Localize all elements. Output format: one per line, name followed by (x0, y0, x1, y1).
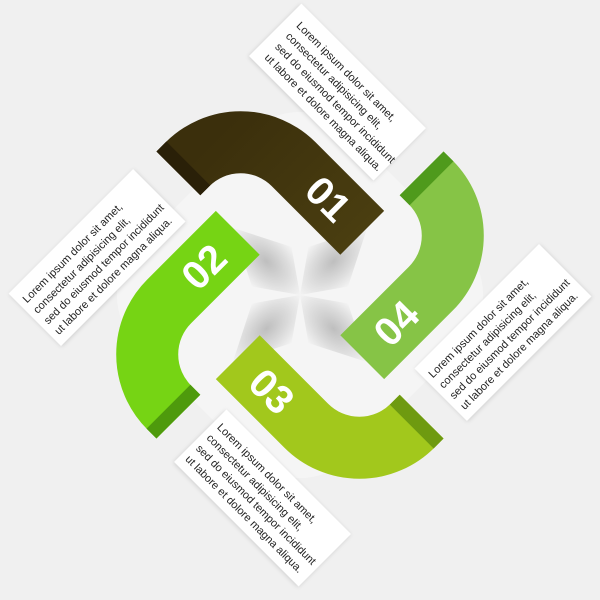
text box 02: consectetur adipisicing elit, (31, 215, 133, 316)
text box 01: sed do eiusmod tempor incididunt (272, 41, 397, 166)
text box 03: sed do eiusmod tempor incididunt (193, 443, 318, 568)
text box 02 (9, 169, 185, 346)
center panel (88, 83, 512, 507)
text box 03: consectetur adipisicing elit, (204, 432, 305, 534)
band 03 (238, 295, 444, 501)
text box 02: Lorem ipsum dolor sit amet, (21, 201, 125, 306)
text box 01: Lorem ipsum dolor sit amet, (294, 20, 398, 124)
center star (166, 161, 434, 429)
text box 02: sed do eiusmod tempor incididunt (42, 202, 167, 327)
number 04: 04 (366, 292, 429, 355)
text box 01: consectetur adipisicing elit, (283, 31, 384, 132)
number 01: 01 (296, 168, 359, 231)
text box 04: Lorem ipsum dolor sit amet, (427, 276, 531, 381)
text box 03: Lorem ipsum dolor sit amet, (214, 422, 319, 526)
text box 03: ut labore et dolore magna aliqua. (183, 453, 305, 576)
band 04 (300, 151, 506, 357)
text box 04: consectetur adipisicing elit, (437, 290, 539, 391)
text box 01: ut labore et dolore magna aliqua. (262, 52, 384, 174)
text box 04: sed do eiusmod tempor incididunt (448, 277, 573, 402)
text box 04: ut labore et dolore magna aliqua. (458, 290, 581, 412)
text box 03 (174, 410, 351, 586)
text box 04 (415, 244, 591, 421)
band 01 (156, 89, 362, 295)
text box 01 (249, 4, 426, 181)
band 02 (94, 233, 300, 439)
number 02: 02 (173, 236, 236, 299)
number 03: 03 (240, 361, 302, 423)
text box 02: ut labore et dolore magna aliqua. (53, 215, 175, 337)
